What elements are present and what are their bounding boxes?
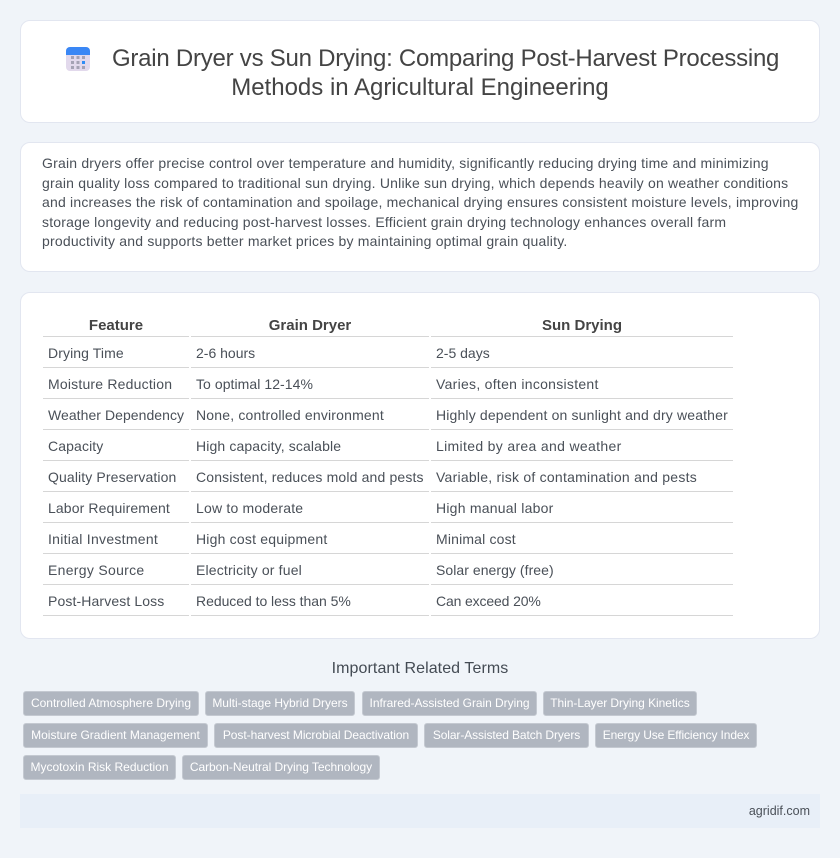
text block: introduction: and increases the risk of contamination and spoilage, mechanical drying ensures consistent moisture levels, improving xyxy=(42,194,798,210)
chip xyxy=(362,691,537,716)
table row: labor requirement: High manual labor xyxy=(436,500,554,516)
text block: introduction: grain quality loss compared to traditional sun drying. Unlike sun drying, which depends heavily on weather conditions xyxy=(42,174,788,190)
text block: introduction: productivity and supports better market prices by maintaining optimal grain quality. xyxy=(42,233,567,249)
icon: calendar xyxy=(66,47,90,71)
table row: weather dependency: None, controlled environment xyxy=(196,407,384,423)
table row: moisture reduction: Varies, often inconsistent xyxy=(436,376,599,392)
panel: intro paragraph xyxy=(20,142,820,272)
table row: moisture reduction xyxy=(43,376,733,399)
table header: Feature xyxy=(89,317,143,334)
title: Methods in Agricultural Engineering xyxy=(231,74,609,101)
footer bar xyxy=(20,794,820,828)
footer source text: agridif.com xyxy=(749,804,810,818)
table row: post-harvest loss xyxy=(43,593,733,616)
table row: post-harvest loss: Reduced to less than 5% xyxy=(196,593,351,609)
table row: post-harvest loss: Post-Harvest Loss xyxy=(48,593,164,609)
table row: quality preservation xyxy=(43,469,733,492)
table row: initial investment: Initial Investment xyxy=(48,531,158,547)
chip xyxy=(543,691,697,716)
text block: introduction: storage longevity and reducing post-harvest losses. Efficient grain drying technology enhances overall farm xyxy=(42,214,726,230)
table row: quality preservation: Variable, risk of contamination and pests xyxy=(436,469,697,485)
heading: related terms: Important Related Terms xyxy=(332,660,508,677)
table row: capacity xyxy=(43,438,733,461)
chip: Controlled Atmosphere Drying xyxy=(31,696,191,710)
table row: capacity: Limited by area and weather xyxy=(436,438,622,454)
panel: comparison table xyxy=(20,292,820,639)
table row: labor requirement: Low to moderate xyxy=(196,500,303,516)
table row: drying time: 2-6 hours xyxy=(196,345,255,361)
chip: Energy Use Efficiency Index xyxy=(603,728,749,742)
table row: weather dependency: Weather Dependency xyxy=(48,407,184,423)
chip: Infrared-Assisted Grain Drying xyxy=(370,696,529,710)
chip: Thin-Layer Drying Kinetics xyxy=(550,696,690,710)
chip xyxy=(424,723,589,748)
related terms chips xyxy=(23,691,757,780)
chip: Post-harvest Microbial Deactivation xyxy=(223,728,409,742)
chip xyxy=(23,755,176,780)
table row: weather dependency: Highly dependent on sunlight and dry weather xyxy=(436,407,728,423)
table row: quality preservation: Quality Preservation xyxy=(48,469,176,485)
table row: capacity: High capacity, scalable xyxy=(196,438,341,454)
chip xyxy=(205,691,355,716)
chip xyxy=(23,691,199,716)
chip: Carbon-Neutral Drying Technology xyxy=(190,760,372,774)
chip: Solar-Assisted Batch Dryers xyxy=(433,728,580,742)
table row: weather dependency xyxy=(43,407,733,430)
chip xyxy=(23,723,208,748)
chip xyxy=(214,723,418,748)
title: Grain Dryer vs Sun Drying: Comparing Post-Harvest Processing xyxy=(112,45,779,72)
table row: energy source xyxy=(43,562,733,585)
table row: labor requirement xyxy=(43,500,733,523)
table row: post-harvest loss: Can exceed 20% xyxy=(436,593,541,609)
table row: labor requirement: Labor Requirement xyxy=(48,500,170,516)
table row: energy source: Solar energy (free) xyxy=(436,562,554,578)
chip xyxy=(182,755,380,780)
text block: introduction xyxy=(42,155,798,249)
chip: Mycotoxin Risk Reduction xyxy=(30,760,169,774)
table row: initial investment: High cost equipment xyxy=(196,531,327,547)
table row: drying time xyxy=(43,345,733,368)
table row: moisture reduction: To optimal 12-14% xyxy=(196,376,313,392)
chip xyxy=(595,723,757,748)
table header: Grain Dryer xyxy=(269,317,351,334)
panel: title card xyxy=(20,20,820,123)
table header xyxy=(43,317,733,337)
table row: drying time: 2-5 days xyxy=(436,345,490,361)
table row: energy source: Electricity or fuel xyxy=(196,562,302,578)
table row: capacity: Capacity xyxy=(48,438,103,454)
table header: Sun Drying xyxy=(542,317,622,334)
chip: Moisture Gradient Management xyxy=(31,728,200,742)
table row: initial investment: Minimal cost xyxy=(436,531,516,547)
table row: quality preservation: Consistent, reduces mold and pests xyxy=(196,469,424,485)
chip: Multi-stage Hybrid Dryers xyxy=(212,696,348,710)
table row: drying time: Drying Time xyxy=(48,345,124,361)
table row: energy source: Energy Source xyxy=(48,562,145,578)
table row: moisture reduction: Moisture Reduction xyxy=(48,376,172,392)
text block: introduction: Grain dryers offer precise control over temperature and humidity, significantly reducing drying time and minimizing xyxy=(42,155,769,171)
title xyxy=(112,45,779,101)
table row: initial investment xyxy=(43,531,733,554)
